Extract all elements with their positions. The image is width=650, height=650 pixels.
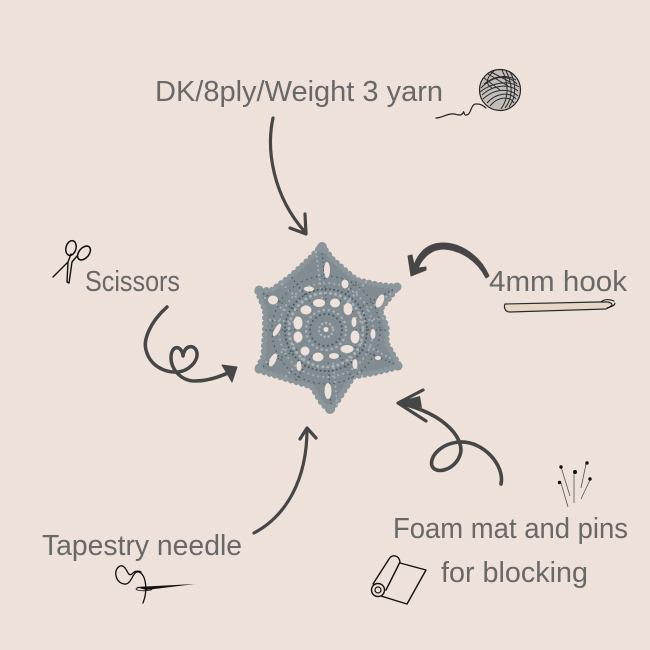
label: foam mat and pins: Foam mat and pins — [393, 513, 628, 545]
arrow: scissors with heart loop — [145, 307, 237, 382]
label: hook: 4mm hook — [489, 266, 628, 298]
bumpy stitched edge — [257, 245, 400, 412]
icon: ball of yarn — [436, 70, 520, 118]
label: scissors: Scissors — [85, 266, 180, 298]
icon: crochet hook — [505, 300, 615, 312]
arrow: foam mat to doily — [397, 390, 501, 484]
arrow: needle to doily — [254, 428, 316, 533]
arrow: hook to doily — [408, 243, 489, 278]
stitch tips — [254, 242, 402, 414]
icon: scissors — [53, 239, 93, 283]
arrow: yarn to doily — [271, 118, 306, 234]
label: tapestry needle: Tapestry needle — [42, 530, 242, 562]
icon: foam mat roll — [372, 556, 426, 604]
crochet snowflake doily — [254, 242, 402, 414]
label: yarn: DK/8ply/Weight 3 yarn — [155, 76, 443, 108]
label: for blocking: for blocking — [441, 557, 588, 589]
icon: pins — [558, 461, 592, 507]
doily holes — [267, 262, 386, 399]
stitch texture — [260, 250, 397, 408]
icon: needle and thread — [116, 566, 195, 603]
